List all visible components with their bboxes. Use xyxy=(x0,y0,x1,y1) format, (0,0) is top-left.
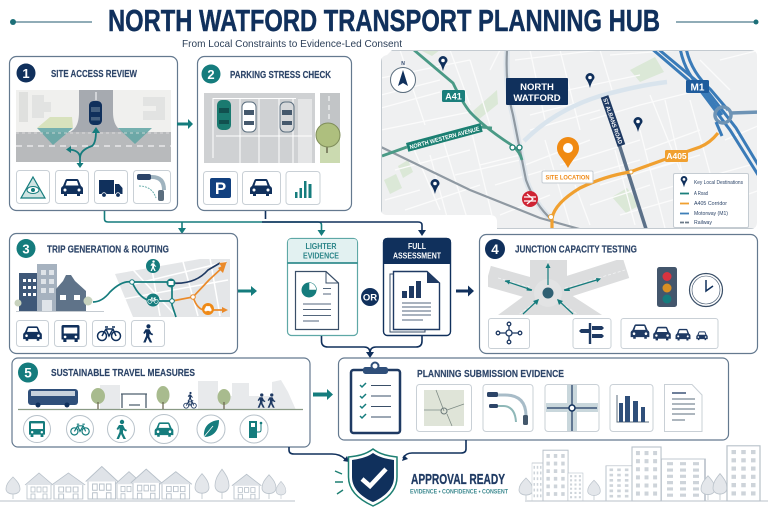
text: strapline: EVIDENCE • CONFIDENCE • CONSENT xyxy=(410,488,508,496)
compass: N xyxy=(401,61,405,67)
road label: A405: A405 xyxy=(666,151,687,161)
location map xyxy=(381,48,760,232)
icon: car xyxy=(242,172,280,204)
map A41 road xyxy=(382,50,522,160)
card: lighter evidence: LIGHTER xyxy=(306,242,337,251)
icon: swept path xyxy=(134,170,170,204)
panel 2: parking stress check xyxy=(198,56,352,210)
connector: submission to approval xyxy=(402,440,466,461)
skyline: houses xyxy=(6,466,286,499)
icon: bus xyxy=(24,416,50,442)
area label: North Watford: NORTH xyxy=(520,82,554,93)
icon: leaf xyxy=(197,415,225,443)
junction diagram xyxy=(488,260,626,320)
map A405 corridor xyxy=(552,133,718,232)
connector: steps 1 and 2 to evidence routes xyxy=(104,211,426,236)
arrow: step 1 to step 2 xyxy=(177,119,193,129)
arrow: step 3 to evidence routes xyxy=(238,286,257,296)
title rule left xyxy=(10,19,92,25)
map legend: A405 Corridor xyxy=(694,201,727,207)
map railway xyxy=(507,50,552,220)
map legend: Railway xyxy=(694,220,713,226)
map legend: A Road xyxy=(694,191,708,197)
road label: M1: M1 xyxy=(691,82,705,94)
heading: junction capacity testing: JUNCTION CAPACITY TESTING xyxy=(515,244,637,256)
icon: visibility triangle xyxy=(16,170,50,204)
thumbnail: document xyxy=(664,384,702,432)
badge 3 xyxy=(16,239,36,258)
road label: A41 xyxy=(442,90,465,102)
icon: bicycle xyxy=(92,320,126,346)
badge 3: 3 xyxy=(22,242,30,256)
street scene illustration xyxy=(18,380,303,410)
icon: clock xyxy=(690,274,722,306)
panel 6: planning submission evidence xyxy=(338,358,728,440)
thumbnail: site map xyxy=(416,384,472,432)
route map illustration xyxy=(93,258,230,317)
badge 1: 1 xyxy=(22,66,30,81)
document with pie chart xyxy=(296,272,338,330)
clipboard icon xyxy=(351,362,400,433)
card: full assessment: ASSESSMENT xyxy=(393,252,441,260)
or badge: OR xyxy=(363,292,377,304)
icon: signpost xyxy=(573,318,611,348)
rail station symbol xyxy=(522,191,538,207)
or badge xyxy=(361,288,379,306)
ground line xyxy=(0,500,768,502)
site location label: SITE LOCATION xyxy=(546,174,590,182)
heading: trip generation and routing: TRIP GENERATION & ROUTING xyxy=(47,244,169,256)
arrow: step 5 to submission xyxy=(313,389,333,400)
map St Albans road xyxy=(618,146,648,228)
arrow: evidence routes to step 4 xyxy=(456,286,474,296)
heading: planning submission evidence: PLANNING SUBMISSION EVIDENCE xyxy=(417,369,564,380)
destination pins xyxy=(430,56,642,194)
icon: pedestrian xyxy=(108,416,134,442)
card: full assessment xyxy=(383,238,451,336)
buildings illustration xyxy=(14,264,104,312)
connector: panel 5 to approval xyxy=(289,447,349,462)
map legend: Motorway (M1) xyxy=(694,211,728,217)
icon: junction node xyxy=(488,318,530,348)
icon: parking: P xyxy=(215,179,226,198)
map street grid xyxy=(381,50,760,228)
title rule right xyxy=(676,20,758,24)
road label: St Albans Road: ST ALBANS ROAD xyxy=(601,98,623,145)
thumbnail: junction flows xyxy=(545,384,599,432)
map legend xyxy=(674,174,748,228)
panel 4: junction capacity testing xyxy=(480,234,758,354)
heading: sustainable travel measures: SUSTAINABLE TRAVEL MEASURES xyxy=(51,368,195,379)
icon: queue of vehicles xyxy=(621,318,718,348)
icon: car xyxy=(16,320,48,346)
heading: parking stress check: PARKING STRESS CHECK xyxy=(230,70,332,81)
junction illustration xyxy=(16,90,171,168)
icon: bicycle xyxy=(66,416,94,442)
icon: electric car xyxy=(150,414,178,444)
panel 1: site access review xyxy=(10,56,178,210)
card: lighter evidence: EVIDENCE xyxy=(303,252,340,260)
compass xyxy=(390,61,416,92)
panel 5: sustainable travel measures xyxy=(12,358,310,447)
icon: charging point xyxy=(240,415,268,443)
road label: North Western Avenue: NORTH WESTERN AVENUE xyxy=(409,127,480,151)
heading: site access review: SITE ACCESS REVIEW xyxy=(51,69,137,80)
icon: bar chart xyxy=(286,172,320,204)
road label: M1 xyxy=(686,80,709,94)
map green spaces xyxy=(384,50,664,213)
card: full assessment: FULL xyxy=(408,242,426,251)
site location label xyxy=(542,171,593,183)
map M1 motorway xyxy=(651,48,760,178)
shield: approval ready xyxy=(335,449,397,506)
car park illustration xyxy=(204,93,340,163)
icon: bus xyxy=(54,320,86,346)
area label: North Watford: WATFORD xyxy=(513,93,561,104)
skyline: apartment buildings xyxy=(519,446,760,501)
icon: traffic light xyxy=(657,267,677,307)
card: lighter evidence xyxy=(288,238,358,336)
icon: pedestrian xyxy=(132,320,164,346)
badge 4: 4 xyxy=(491,242,499,257)
map river xyxy=(524,82,667,141)
text: approval ready: APPROVAL READY xyxy=(411,471,505,488)
area label: North Watford xyxy=(506,78,568,105)
badge 4 xyxy=(485,239,505,259)
badge 1 xyxy=(16,64,36,82)
subtitle: From Local Constraints to Evidence-Led Consent xyxy=(182,38,402,50)
map legend: Key Local Destinations xyxy=(694,180,743,186)
badge 2 xyxy=(202,64,220,84)
icon: car xyxy=(56,170,88,204)
thumbnail: swept path xyxy=(483,384,533,432)
stacked documents with bar chart xyxy=(390,272,440,332)
connector: evidence routes to submission xyxy=(322,336,422,358)
icon: truck xyxy=(94,170,128,204)
thumbnail: bar chart xyxy=(610,384,653,432)
road label: A41: A41 xyxy=(445,92,462,102)
badge 5 xyxy=(18,362,38,382)
badge 2: 2 xyxy=(207,67,215,82)
badge 5: 5 xyxy=(24,366,32,380)
panel 3: trip generation and routing xyxy=(10,234,238,354)
site location pin xyxy=(557,137,579,168)
icon: parking xyxy=(204,172,238,204)
